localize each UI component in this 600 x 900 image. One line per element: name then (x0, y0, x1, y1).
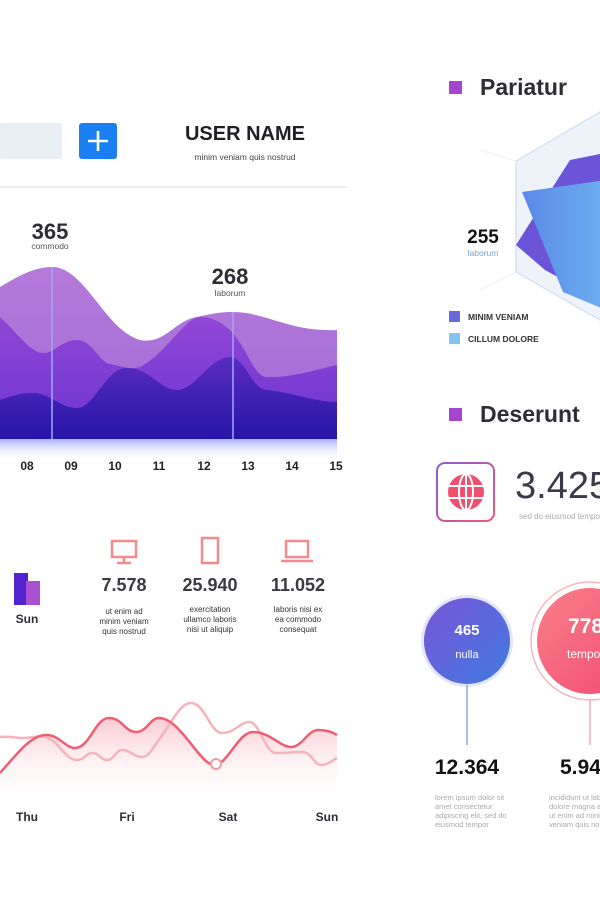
heading deserunt: Deserunt (480, 401, 580, 427)
x axis labels: 14 (285, 459, 299, 473)
icon: monitor (112, 541, 136, 563)
stat 12.364: eiusmod tempor (435, 820, 489, 829)
x axis labels: 13 (241, 459, 255, 473)
legend: MINIM VENIAM (468, 312, 528, 322)
stat 7.578: minim veniam (99, 617, 149, 626)
stat 25.940: ullamco laboris (183, 615, 237, 624)
circle 465 (421, 595, 513, 745)
icon: tablet (202, 538, 218, 563)
stat 25.940 (182, 575, 238, 634)
stat 12.364: adipiscing elit, sed do (435, 811, 507, 820)
user name heading: minim veniam quis nostrud (194, 152, 296, 162)
callout 255: 255 (467, 227, 499, 248)
x axis labels: 12 (197, 459, 211, 473)
stat 7.578 (99, 575, 149, 636)
circle 778 (531, 582, 600, 745)
stat 12.364: amet consectetur (435, 802, 493, 811)
day labels (16, 810, 338, 824)
stat 12.364: lorem ipsum dolor sit (435, 793, 505, 802)
pink line chart (0, 703, 337, 808)
day labels: Sat (219, 810, 237, 824)
callout 255: laborum (468, 248, 498, 258)
legend (449, 311, 539, 344)
x axis labels: 09 (64, 459, 78, 473)
stat 25.940: exercitation (190, 605, 230, 614)
stat 11.052: consequat (280, 625, 317, 634)
icon: laptop (281, 541, 313, 561)
x axis labels: 15 (329, 459, 343, 473)
stat 11.052: 11.052 (271, 575, 325, 595)
stat 11.052: laboris nisi ex (274, 605, 322, 614)
stat 7.578: quis nostrud (102, 627, 146, 636)
x axis labels: 11 (153, 459, 166, 473)
radar chart (480, 105, 600, 327)
user name heading: USER NAME (185, 123, 305, 145)
stat 11.052: ea commodo (275, 615, 322, 624)
day labels: Thu (16, 810, 38, 824)
search box (0, 123, 62, 159)
legend: CILLUM DOLORE (468, 334, 539, 344)
x axis labels: 08 (20, 459, 34, 473)
area chart (0, 267, 337, 461)
stat 5.94 (549, 756, 600, 829)
stat 25.940: 25.940 (182, 575, 238, 595)
user name heading (185, 123, 305, 162)
stat 11.052 (271, 575, 325, 634)
stat 7.578: 7.578 (101, 575, 147, 595)
callout 268: laborum (215, 288, 245, 298)
stat 12.364: 12.364 (435, 756, 499, 779)
callout 268: 268 (212, 264, 248, 289)
x axis labels: 10 (108, 459, 122, 473)
callout 255 (467, 227, 499, 258)
heading pariatur: Pariatur (480, 74, 567, 100)
stat 12.364 (435, 756, 507, 829)
icon: globe (437, 463, 494, 521)
circle 465: 465 (454, 622, 480, 639)
day labels: Sun (316, 810, 338, 824)
callout 365: 365 (32, 219, 68, 244)
icon: bar (14, 573, 40, 605)
day labels: Fri (119, 810, 135, 824)
circle 465: nulla (455, 649, 479, 661)
x axis labels (20, 459, 343, 473)
callout 365: commodo (31, 241, 69, 251)
icon: plus button (79, 123, 117, 159)
label sun: Sun (16, 612, 38, 626)
stat 25.940: nisi ut aliquip (187, 625, 234, 634)
stat 7.578: ut enim ad (105, 607, 143, 616)
